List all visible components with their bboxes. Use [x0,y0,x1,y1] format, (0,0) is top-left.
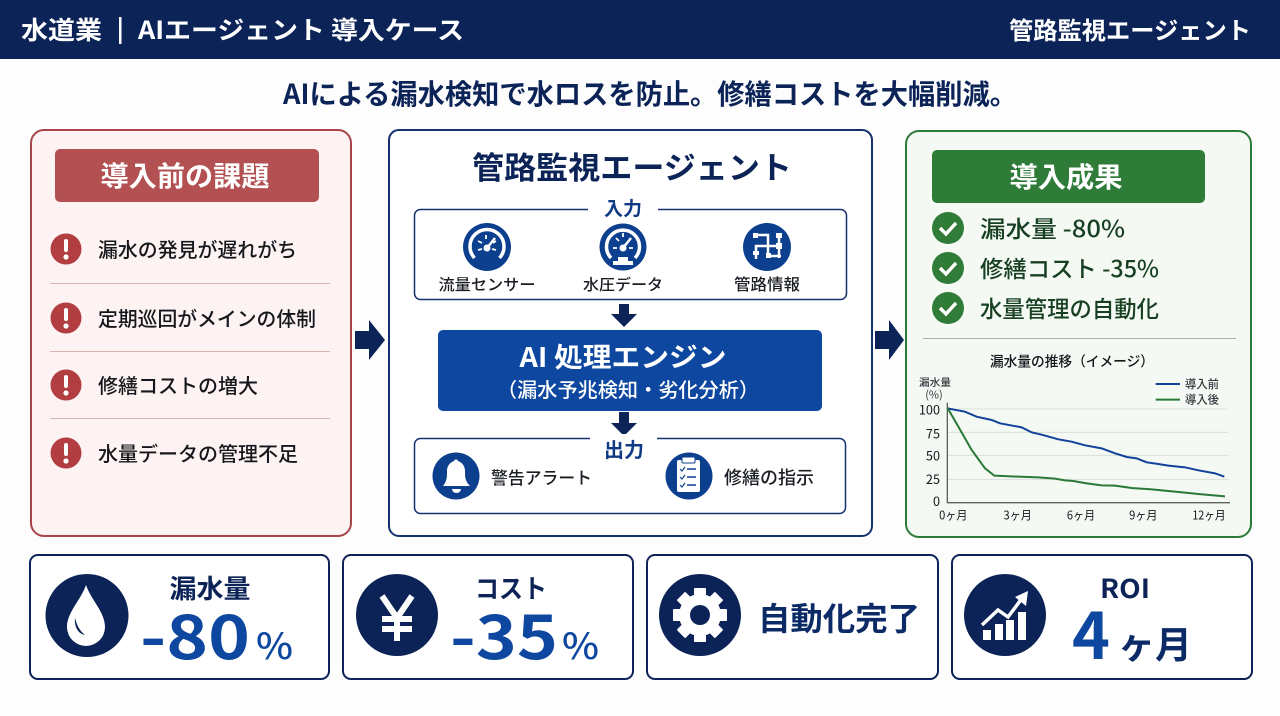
line: after adoption [947,408,1225,496]
results heading [932,150,1205,203]
issue 4: 水量データの管理不足 [98,438,298,467]
x axis labels [939,506,1226,523]
value: -80 [140,590,250,677]
KPI card: leakage [30,555,329,679]
input label: 入力 [604,194,642,221]
y axis labels: 漏水量 [919,374,951,389]
result 1: 漏水量 -80% [980,210,1125,244]
label: repair instruction: 修繕の指示 [724,464,814,490]
x axis labels: 3ヶ月 [1003,506,1032,523]
icon: repair instruction [666,452,712,500]
arrow: agent to results [875,320,904,360]
y axis labels: (%) [925,386,943,402]
y axis labels: 100 [919,400,940,419]
arrow: issues to agent [355,320,385,360]
header title: AIエージェント 導入ケース [137,11,464,47]
result 1 [932,210,1125,244]
legend: 導入前 [1185,376,1219,392]
chart title: 漏水量の推移（イメージ） [990,352,1154,372]
KPI card: leakage: % [256,618,293,670]
y axis labels: 0 [933,491,940,510]
label: water pressure: 水圧データ [583,273,663,295]
label: flow sensor: 流量センサー [438,273,536,295]
legend: 導入後 [1185,392,1220,408]
y axis labels: 75 [926,423,940,442]
x axis labels: 9ヶ月 [1129,506,1157,523]
output group [414,434,846,514]
results heading: 導入成果 [1010,156,1122,196]
label: コスト [475,569,547,606]
y axis labels [919,374,951,510]
issues heading: 導入前の課題 [100,155,270,195]
icon: gear [659,574,741,656]
label: pipeline info: 管路情報 [734,271,800,295]
result 3: 水量管理の自動化 [980,290,1159,324]
line: before adoption [947,408,1224,477]
issues heading [55,149,319,202]
label: 自動化完了 [758,594,920,640]
AI engine box: AI 処理エンジン [518,336,726,375]
KPI card: cost: % [562,618,599,670]
header industry: 水道業 [21,11,102,47]
issue 1: 漏水の発見が遅れがち [98,234,297,263]
main headline: AIによる漏水検知で水ロスを防止。修繕コストを大幅削減。 [282,73,1017,113]
arrow: input to engine [611,304,637,327]
panel: pre-adoption issues [31,130,351,536]
header bar [0,0,1280,59]
icon: yen [356,574,438,656]
icon: pipeline info [743,223,791,271]
issue 3: 修繕コストの増大 [98,370,258,399]
header agent name: 管路監視エージェント [1009,11,1251,46]
x axis labels: 12ヶ月 [1192,506,1226,523]
label: 漏水量 [170,569,250,606]
input group [414,194,846,300]
output label: 出力 [604,434,644,463]
chart: leakage trend [919,352,1230,523]
value: -35 [450,590,558,677]
icon: water drop [46,574,128,657]
icon: water pressure [600,224,646,270]
y axis labels: 50 [926,446,940,465]
panel: pipeline monitoring agent [389,130,872,536]
KPI card: ROI: ヶ月 [1118,615,1192,669]
x axis labels: 6ヶ月 [1067,506,1095,523]
AI engine box [438,330,822,411]
icon: flow sensor [463,223,511,271]
x axis labels: 0ヶ月 [939,506,967,523]
KPI card: automation [647,555,938,679]
KPI card: cost [343,555,633,679]
label: ROI [1100,569,1150,606]
result 2: 修繕コスト -35% [980,250,1159,284]
arrow: engine to output [611,412,637,436]
label: alert: 警告アラート [491,464,592,489]
value: 4 [1072,586,1110,678]
issue 2: 定期巡回がメインの体制 [98,303,316,332]
agent heading: 管路監視エージェント [472,143,792,188]
KPI card: ROI [952,555,1252,679]
icon: growth chart [964,574,1046,656]
icon: alert bell [432,452,480,500]
y axis labels: 25 [926,469,940,488]
panel: results [906,131,1251,537]
legend [1156,376,1220,408]
AI engine box: （漏水予兆検知・劣化分析） [497,374,759,403]
